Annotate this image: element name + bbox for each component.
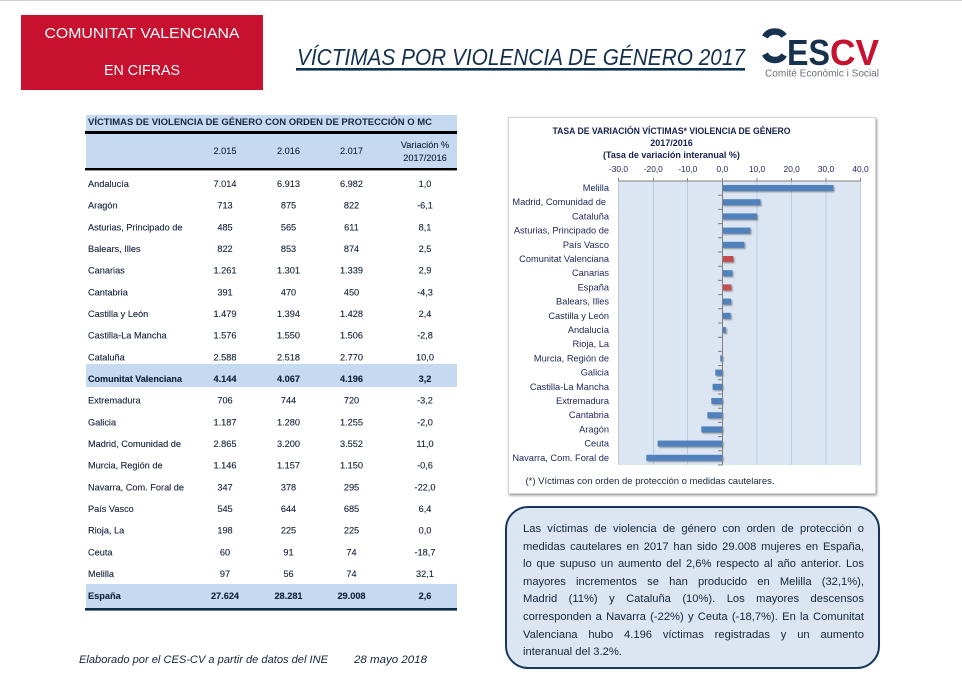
table row names: Madrid, Comunidad de (88, 439, 181, 449)
table column 2015: 347 (217, 482, 233, 492)
category labels: Madrid, Comunidad de (512, 197, 606, 207)
table column variation: 11,0 (416, 439, 434, 449)
axis labels: 10,0 (749, 164, 765, 174)
axis labels: 20,0 (784, 164, 800, 174)
callout: summary text: corresponden a Navarra (-22%) y Ceuta (-18,7%). En la Comunitat (523, 611, 864, 623)
table: victims by region (85, 115, 457, 611)
table column variation: 32,1 (416, 569, 434, 579)
table column 2016 (274, 179, 303, 601)
category labels: España (578, 282, 610, 292)
table column 2016: 1.157 (277, 461, 300, 471)
table column 2015: 97 (220, 569, 230, 579)
table column 2015: 485 (217, 222, 233, 232)
table column variation: -2,8 (417, 331, 433, 341)
category labels: Aragón (579, 424, 609, 434)
table header: 2.017 (340, 146, 363, 156)
table column 2015: 713 (217, 201, 233, 211)
table column 2016: 470 (281, 287, 296, 297)
chart title (552, 125, 790, 160)
table row names: Castilla-La Mancha (88, 331, 168, 341)
category labels: Asturias, Principado de (514, 226, 609, 236)
table column variation: 2,9 (419, 266, 431, 276)
table column 2017: 2.770 (340, 352, 363, 362)
category labels: Extremadura (556, 396, 610, 406)
logo: CESCV (765, 32, 879, 80)
banner: Comunitat Valenciana en cifras: EN CIFRAS (104, 62, 180, 79)
table column variation (415, 179, 435, 601)
category labels (512, 183, 610, 463)
table column 2017: 74 (346, 547, 357, 557)
table column 2017: 1.428 (340, 309, 363, 319)
table column 2016: 91 (283, 547, 294, 557)
table column 2015: 1.261 (214, 266, 236, 276)
table column 2017: 685 (344, 504, 359, 514)
table column 2015: 7.014 (214, 179, 236, 189)
category labels: Balears, Illes (556, 297, 609, 307)
axis labels (609, 164, 869, 174)
table column 2016: 3.200 (277, 439, 300, 449)
axis labels: -10,0 (678, 164, 698, 174)
category labels: Cataluña (572, 211, 610, 221)
table column 2016: 1.394 (277, 309, 300, 319)
table row names: Melilla (88, 569, 115, 579)
table column 2017: 6.982 (340, 179, 363, 189)
logo: CESCV: CV (830, 32, 879, 73)
table column 2017: 1.339 (340, 266, 363, 276)
table column 2016: 875 (281, 201, 296, 211)
callout: summary text: interanual del 3.2%. (523, 646, 622, 658)
table column 2017 (337, 179, 366, 601)
callout: summary text: Valenciana hubo 4.196 víctimas registradas y un aumento (523, 629, 864, 641)
table column 2017: 4.196 (340, 374, 363, 384)
table header: 2.016 (277, 146, 300, 156)
table row names: Andalucía (88, 179, 130, 189)
axis labels: 30,0 (818, 164, 834, 174)
axes (618, 178, 860, 465)
table column variation: 2,6 (419, 591, 431, 601)
table column 2015: 1.576 (214, 331, 236, 341)
table row names: Aragón (88, 201, 118, 211)
table column 2017: 1.255 (340, 417, 363, 427)
banner: Comunitat Valenciana en cifras: COMUNITAT VALENCIANA (44, 25, 240, 42)
table column variation: 0,0 (419, 526, 431, 536)
callout: summary text: medidas cautelares en 2017 han sido 29.008 mujeres en España, (523, 541, 864, 553)
table column 2015: 4.144 (214, 374, 237, 384)
table row names: Ceuta (88, 547, 113, 557)
table column 2015: 1.479 (214, 309, 236, 319)
category labels: Castilla-La Mancha (530, 382, 610, 392)
callout: summary text (505, 506, 880, 669)
table column variation: -3,2 (417, 396, 433, 406)
bars (646, 185, 833, 461)
table column variation: -4,3 (417, 287, 433, 297)
category labels: Comunitat Valenciana (519, 254, 610, 264)
axis labels: 0,0 (716, 164, 728, 174)
category labels: Cantabria (569, 410, 610, 420)
callout: summary text: mayores incrementos se han producido en Melilla (32,1%), (523, 576, 864, 588)
table title band: VÍCTIMAS DE VIOLENCIA DE GÉNERO CON ORDEN DE PROTECCIÓN O MC (88, 116, 432, 127)
table column 2016: 225 (281, 526, 296, 536)
category labels: Melilla (583, 183, 610, 193)
table row names (88, 179, 184, 601)
table row names: Extremadura (88, 396, 141, 406)
table column 2015: 2.588 (214, 352, 236, 362)
table row names: Galicia (88, 417, 117, 427)
table column 2017: 295 (344, 482, 359, 492)
table column variation: 2,5 (419, 244, 431, 254)
highlight rows (85, 364, 457, 611)
table column variation: -6,1 (417, 201, 433, 211)
table column 2017: 720 (344, 396, 359, 406)
table column 2016: 4.067 (277, 374, 300, 384)
table row names: Canarias (88, 266, 125, 276)
table column variation: -2,0 (417, 417, 433, 427)
callout: summary text: Madrid (11%) y Cataluña (10%). Los mayores descensos (523, 593, 864, 605)
category labels: Navarra, Com. Foral de (512, 453, 609, 463)
table column 2016: 56 (283, 569, 294, 579)
table row names: España (88, 591, 122, 601)
table column variation: 2,4 (419, 309, 431, 319)
chart title: TASA DE VARIACIÓN VÍCTIMAS* VIOLENCIA DE GÉNERO (552, 125, 790, 136)
table header: 2017/2016 (403, 153, 447, 163)
table column 2016: 644 (281, 504, 296, 514)
table row names: Castilla y León (88, 309, 148, 319)
banner: Comunitat Valenciana en cifras (21, 15, 263, 90)
table column 2017: 3.552 (340, 439, 363, 449)
table column 2016: 2.518 (277, 352, 300, 362)
category labels: Ceuta (584, 439, 610, 449)
category labels: País Vasco (563, 240, 609, 250)
table column 2016: 853 (281, 244, 296, 254)
table row names: Murcia, Región de (88, 461, 163, 471)
table column 2017: 874 (344, 244, 359, 254)
category labels: Canarias (572, 268, 609, 278)
table row names: Rioja, La (88, 526, 125, 536)
table column 2017: 1.506 (340, 331, 363, 341)
table column variation: 10,0 (416, 352, 434, 362)
table column variation: 3,2 (419, 374, 431, 384)
table column 2016: 1.280 (277, 417, 300, 427)
table column 2016: 1.301 (277, 266, 300, 276)
chart title: (Tasa de variación interanual %) (603, 150, 740, 160)
plot area (618, 181, 860, 465)
source note: 28 mayo 2018 (353, 654, 428, 666)
table column 2017: 1.150 (340, 461, 363, 471)
table header: Variación % (401, 140, 449, 150)
category labels: Murcia, Región de (534, 353, 609, 363)
table column 2015: 1.146 (214, 461, 236, 471)
table column 2017: 225 (344, 526, 359, 536)
category labels: Castilla y León (548, 311, 609, 321)
table column 2016: 1.550 (277, 331, 300, 341)
table column 2015: 391 (217, 287, 233, 297)
axis labels: -20,0 (644, 164, 663, 174)
category labels: Galicia (581, 368, 610, 378)
table column 2017: 74 (346, 569, 357, 579)
table column 2015: 198 (217, 526, 233, 536)
table column 2015: 27.624 (211, 591, 240, 601)
chart footnote: (*) Víctimas con orden de protección o medidas cautelares. (526, 475, 774, 486)
table column variation: 8,1 (419, 222, 431, 232)
table column 2015: 1.187 (214, 417, 236, 427)
table row names: Balears, Illes (88, 244, 141, 254)
axis labels: 40,0 (852, 164, 869, 174)
category labels: Andalucía (568, 325, 610, 335)
table row names: Asturias, Principado de (88, 222, 182, 232)
table column 2015: 706 (217, 396, 233, 406)
table column 2015: 545 (217, 504, 233, 514)
table column 2015: 60 (220, 547, 230, 557)
table column 2015: 2.865 (214, 439, 236, 449)
table row names: Cantabria (88, 287, 129, 297)
callout: summary text: lo que supuso un aumento del 2,6% respecto al año anterior. Los (523, 558, 864, 570)
category labels: Rioja, La (572, 339, 610, 349)
table column 2016: 378 (281, 482, 296, 492)
table column 2015: 822 (217, 244, 233, 254)
table column variation: -0,6 (417, 461, 433, 471)
table row names: Navarra, Com. Foral de (88, 482, 184, 492)
logo: CESCV: ES (787, 32, 830, 73)
table column variation: 6,4 (419, 504, 431, 514)
table header (85, 134, 457, 170)
table column 2015 (211, 179, 240, 601)
title: VÍCTIMAS POR VIOLENCIA DE GÉNERO 2017 (297, 44, 746, 70)
panel: variation rate chart (508, 118, 876, 494)
table title band (85, 115, 457, 134)
table column 2017: 29.008 (337, 591, 366, 601)
table column 2017: 611 (344, 222, 359, 232)
callout: summary text: Las víctimas de violencia de género con orden de protección o (523, 523, 864, 535)
table row names: Cataluña (88, 352, 126, 362)
axis labels: -30,0 (609, 164, 628, 174)
table column 2016: 565 (281, 222, 296, 232)
table column 2016: 6.913 (277, 179, 300, 189)
table header: 2.015 (214, 146, 236, 156)
table column variation: -22,0 (415, 482, 435, 492)
table row names: País Vasco (88, 504, 134, 514)
table column variation: 1,0 (419, 179, 431, 189)
chart title: 2017/2016 (650, 138, 693, 148)
logo: CESCV: Comité Econòmic i Social (765, 68, 879, 80)
source note: Elaborado por el CES-CV a partir de datos del INE (79, 654, 329, 666)
table column 2016: 744 (281, 396, 296, 406)
table column 2016: 28.281 (274, 591, 303, 601)
table column variation: -18,7 (415, 547, 435, 557)
table column 2017: 822 (344, 201, 359, 211)
table row names: Comunitat Valenciana (88, 374, 183, 384)
table column 2017: 450 (344, 287, 359, 297)
